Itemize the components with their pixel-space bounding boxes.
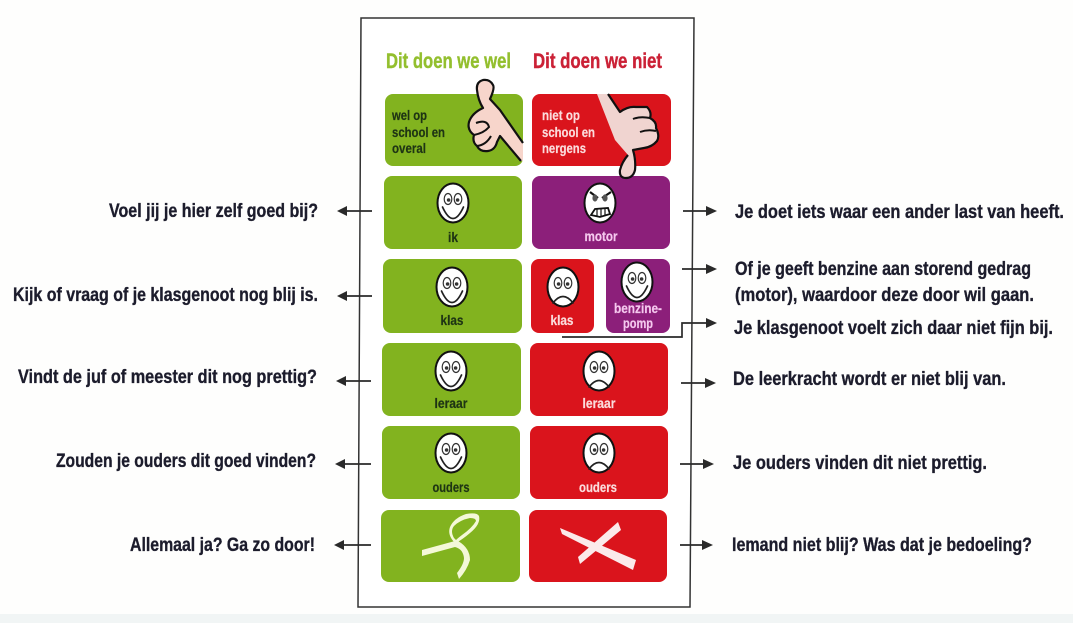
text: statement leraar: De leerkracht wordt er niet blij van. bbox=[733, 368, 1006, 390]
icon: happy face bbox=[436, 434, 466, 472]
panel: leraar (red) bbox=[530, 343, 668, 416]
icon: happy face bbox=[622, 262, 652, 302]
icon: happy face bbox=[436, 268, 468, 306]
panel: niet op school en nergens bbox=[532, 94, 671, 178]
text: question 3: Vindt de juf of meester dit nog prettig? bbox=[18, 366, 317, 388]
panel: wel op school en overal: overal bbox=[392, 140, 426, 156]
panel: motor (purple) bbox=[532, 176, 670, 249]
icon: thumb up bbox=[469, 80, 523, 161]
icon: angry face bbox=[584, 184, 616, 222]
arrow: left 1 bbox=[337, 206, 372, 216]
panel: klas (green): klas bbox=[440, 312, 464, 328]
panel: wel op school en overal: school en bbox=[392, 124, 445, 140]
text: question 4: Zouden je ouders dit goed vinden? bbox=[56, 450, 316, 472]
panel: niet op school en nergens: niet op bbox=[542, 107, 580, 123]
arrow: right 4 bbox=[681, 378, 716, 388]
icon: sad face bbox=[548, 268, 578, 306]
panel: cross (red) bbox=[529, 510, 667, 582]
arrow: right 6 bbox=[680, 540, 713, 550]
panel: leraar (green) bbox=[382, 343, 521, 416]
panel: wel op school en overal bbox=[385, 80, 523, 166]
text: question 1: Voel jij je hier zelf goed bij? bbox=[109, 200, 318, 222]
panel: ouders (green): ouders bbox=[432, 479, 470, 495]
heading: Dit doen we wel: Dit doen we wel bbox=[386, 50, 511, 73]
arrow: right 5 bbox=[680, 459, 714, 469]
text: question 5: Allemaal ja? Ga zo door! bbox=[130, 534, 315, 556]
arrow: left 5 bbox=[334, 540, 371, 550]
icon: happy face bbox=[438, 184, 468, 222]
arrow: left 2 bbox=[337, 291, 372, 301]
panel: klas (red): klas bbox=[550, 312, 574, 328]
arrow: right 2 bbox=[682, 264, 717, 274]
panel: niet op school en nergens: school en bbox=[542, 124, 595, 140]
panel: poster frame bbox=[358, 18, 694, 607]
panel: ribbon (green) bbox=[381, 510, 520, 582]
panel: motor (purple): motor bbox=[584, 228, 618, 244]
panel: benzinepomp (purple): benzine- bbox=[614, 300, 662, 316]
panel: ouders (green) bbox=[382, 426, 520, 499]
arrow: right 1 bbox=[683, 206, 717, 216]
icon: ribbon bbox=[422, 513, 479, 579]
arrow: left 3 bbox=[336, 376, 371, 386]
icon: thumb down bbox=[597, 94, 658, 178]
panel: ouders (red) bbox=[530, 426, 668, 499]
heading: Dit doen we niet: Dit doen we niet bbox=[533, 50, 662, 73]
panel: ik (green) bbox=[384, 176, 522, 249]
panel: benzinepomp (purple) bbox=[606, 259, 670, 333]
panel: leraar (red): leraar bbox=[582, 395, 616, 411]
icon: cross bbox=[560, 522, 636, 570]
panel: benzinepomp (purple): pomp bbox=[623, 315, 653, 331]
icon: sad face bbox=[584, 434, 614, 472]
panel: klas (red) bbox=[531, 259, 594, 333]
text: question 2: Kijk of vraag of je klasgenoot nog blij is. bbox=[13, 284, 318, 306]
text: statement ouders: Je ouders vinden dit niet prettig. bbox=[733, 452, 987, 474]
arrow: left 4 bbox=[335, 459, 371, 469]
arrow: elbow to klasgenoot bbox=[562, 318, 717, 337]
panel: leraar (green): leraar bbox=[434, 395, 468, 411]
page bottom tint bbox=[0, 614, 1073, 623]
text: statement benzinepomp bbox=[735, 258, 1034, 306]
panel: ik (green): ik bbox=[448, 229, 458, 245]
panel: ouders (red): ouders bbox=[579, 479, 617, 495]
icon: sad face bbox=[584, 352, 614, 390]
panel: klas (green) bbox=[383, 259, 522, 333]
panel: niet op school en nergens: nergens bbox=[542, 140, 586, 156]
panel: wel op school en overal: wel op bbox=[391, 107, 427, 123]
icon: happy face bbox=[436, 352, 466, 390]
